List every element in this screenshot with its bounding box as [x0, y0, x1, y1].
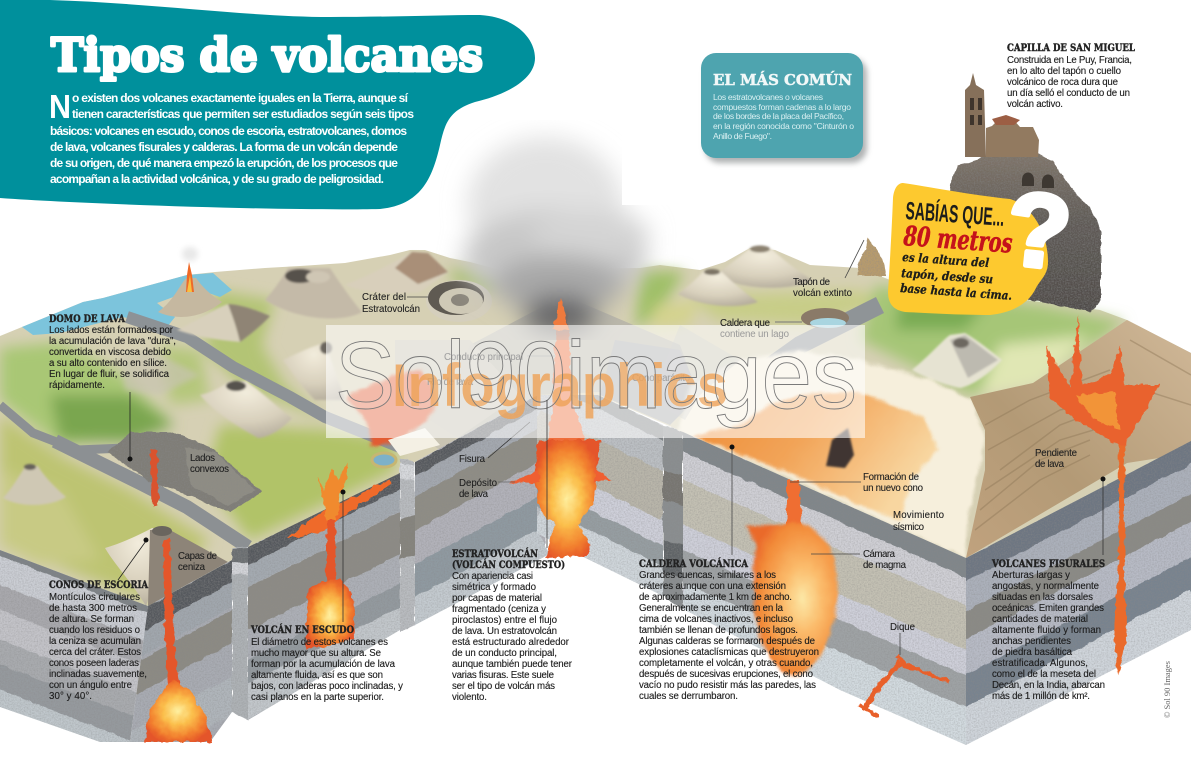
text block: caldera volcánica: cima de volcanes inactivos, e incluso: [639, 614, 793, 625]
text block: volcanes fisurales: [991, 559, 1105, 702]
text block: capilla de San Miguel: Construida en Le Puy, Francia,: [1007, 55, 1132, 66]
leader: volcán en escudo: [340, 490, 346, 622]
text block: estratovolcán: simétrica y formado: [452, 582, 536, 593]
callout: el más común: de los bordes de la placa del Pacífico,: [713, 111, 844, 121]
callout: el más común: compuestos forman cadenas a lo largo: [713, 102, 851, 112]
callout: el más común: Anillo de Fuego".: [713, 131, 772, 141]
label: pendiente de lava: [1035, 448, 1077, 470]
text block: conos de escoria: cerca del cráter. Estos: [49, 647, 141, 658]
text block: volcán en escudo: bajos, con laderas poco inclinadas, y: [251, 681, 403, 692]
title banner: [0, 0, 535, 209]
lava river: [345, 370, 436, 447]
label: tapón de volcán extinto: Tapón de: [793, 277, 830, 288]
cone: right: [912, 333, 1002, 388]
text block: caldera volcánica: [639, 558, 819, 702]
text block: volcanes fisurales: de piedra basáltica: [992, 647, 1073, 658]
rock: [945, 150, 1101, 312]
text block: conos de escoria: de hasta 300 metros: [49, 603, 137, 614]
text block: caldera volcánica: completamente el volcán, y otras cuando,: [639, 658, 813, 669]
terrain surface: [0, 238, 1191, 606]
text block: conos de escoria: con un ángulo entre: [49, 680, 132, 691]
text block: volcanes fisurales: más de 1 millón de km².: [992, 691, 1090, 702]
label: fisura: Fisura: [459, 454, 486, 465]
label: tapón de volcán extinto: volcán extinto: [793, 288, 852, 299]
block face: estratovolcán right: [537, 395, 663, 596]
text block: domo de lava: [49, 314, 176, 391]
crater of the stratovolcano: [426, 280, 492, 322]
text block: volcanes fisurales: Decán, en la India, abarcan: [992, 680, 1105, 691]
label: lados convexos: convexos: [190, 464, 229, 475]
text block: volcanes fisurales: anchas pendientes: [992, 636, 1071, 647]
leader: volcanes fisurales: [1100, 476, 1106, 555]
cone: beyond stratovolcano: [345, 252, 448, 293]
water: [22, 273, 232, 335]
text block: volcán en escudo: [250, 624, 403, 703]
label: movimiento sísmico: sísmico: [893, 522, 924, 533]
text block: volcanes fisurales: VOLCANES FISURALES: [991, 559, 1105, 570]
cone: beside the watermark: [283, 342, 345, 400]
text block: domo de lava: rápidamente.: [49, 380, 105, 391]
block face: caldera: [675, 425, 975, 750]
text block: capilla de San Miguel: volcán activo.: [1007, 99, 1063, 110]
text block: capilla de San Miguel: CAPILLA DE SAN MIGUEL: [1007, 43, 1135, 54]
cone: cinder cone: [105, 526, 228, 606]
leader: conos de escoria: [118, 538, 148, 580]
watermark: Infographics: [392, 352, 728, 419]
text block: domo de lava: a su alto contenido en sílice.: [49, 358, 167, 369]
block face: conos de escoria, right side: [130, 560, 232, 742]
bell tower: [965, 73, 986, 157]
label: depósito de lava: de lava: [459, 489, 489, 500]
callout: el más común: EL MÁS COMÚN: [713, 71, 852, 89]
text block: estratovolcán: varias fisuras. Este suele: [452, 670, 554, 681]
smoke plume: [463, 137, 650, 335]
text block: volcán en escudo: casi planos en la parte superior.: [251, 692, 384, 703]
lava: cono de escoria: [144, 538, 212, 742]
label: capas de ceniza: [178, 551, 217, 573]
text block: domo de lava: la acumulación de lava "dura",: [49, 336, 176, 347]
cone: left small: [3, 464, 66, 505]
text block: estratovolcán: piroclastos) entre el flujo: [452, 615, 557, 626]
text block: estratovolcán: ESTRATOVOLCÁN: [452, 548, 538, 560]
text block: estratovolcán: (VOLCÁN COMPUESTO): [452, 559, 565, 571]
text block: capilla de San Miguel: volcánico de roca dura que: [1007, 77, 1118, 88]
text block: capilla de San Miguel: [1007, 43, 1135, 110]
label: cámara de magma: de magma: [863, 560, 907, 571]
text block: caldera volcánica: también se llenan de profundos lagos.: [639, 625, 798, 636]
text block: volcán en escudo: mucho mayor que su altura. Se: [251, 648, 381, 659]
fact: tapón, desde su: [901, 266, 994, 286]
cone: under dome text: [120, 350, 200, 395]
text block: conos de escoria: 30° y 40°.: [49, 691, 92, 702]
label: lados convexos: [190, 453, 229, 475]
base land: [0, 248, 1191, 606]
callout: sabías que: [888, 170, 1076, 315]
text block: volcán en escudo: El diámetro de estos volcanes es: [251, 637, 388, 648]
rock and chapel: [945, 73, 1101, 312]
cones: back right: [678, 246, 812, 306]
text block: estratovolcán: de un conducto principal,: [452, 648, 557, 659]
text block: caldera volcánica: Grandes cuencas, similares a los: [639, 570, 776, 581]
eruption glow: [553, 298, 569, 330]
question mark: ?: [1001, 170, 1076, 292]
label: lados convexos: Lados: [190, 453, 215, 464]
callout: el más común: Los estratovolcanes o volcanes: [713, 92, 823, 102]
text block: caldera volcánica: después de sucesivas erupciones, el cono: [639, 669, 813, 680]
text block: estratovolcán: fragmentado (ceniza y: [452, 604, 546, 615]
label: dique: Dique: [890, 622, 915, 633]
text block: volcanes fisurales: angostas, y normalmente: [992, 581, 1099, 592]
text block: caldera volcánica: Generalmente se encuentran en la: [639, 603, 784, 614]
intro text: de su origen, de qué manera empezó la erupción, de los procesos que: [50, 156, 398, 170]
text block: conos de escoria: cuando los residuos o: [49, 625, 140, 636]
label: formación de un nuevo cono: Formación de: [863, 472, 919, 483]
text block: caldera volcánica: de aproximadamente 1 km de ancho.: [639, 592, 792, 603]
text block: caldera volcánica: vacío no pudo resistir más las paredes, las: [639, 680, 816, 691]
caldera lake: [801, 308, 849, 328]
label: caldera que contiene un lago: Caldera que: [720, 318, 770, 329]
label: cámara de magma: [811, 549, 907, 571]
text block: conos de escoria: [49, 580, 148, 702]
central cone: [430, 300, 700, 440]
block edge strip: center right: [663, 425, 683, 609]
fact: base hasta la cima.: [900, 281, 1012, 303]
text block: caldera volcánica: cráteres aunque con una extensión: [639, 581, 786, 592]
cone: middle left: [200, 381, 292, 438]
leader: caldera volcánica: [730, 444, 734, 555]
fact: [900, 250, 1012, 303]
text block: domo de lava: Los lados están formados por: [49, 325, 174, 336]
text block: estratovolcán: [452, 548, 573, 703]
lava: estratovolcán: [508, 298, 612, 558]
new cone crater: [826, 428, 854, 468]
block face: estratovolcán left: [405, 390, 545, 630]
lateral dome rock: [108, 432, 262, 512]
label: formación de un nuevo cono: [790, 472, 923, 494]
text block: estratovolcán: Con apariencia casi: [452, 571, 533, 582]
caldera inner: [692, 392, 938, 520]
leader line: fisura: [488, 422, 530, 458]
block edge strip: [232, 547, 248, 720]
text block: volcán en escudo: altamente fluida, así es que son: [251, 670, 383, 681]
text block: conos de escoria: Montículos circulares: [49, 592, 140, 603]
text block: volcán en escudo: VOLCÁN EN ESCUDO: [250, 624, 354, 636]
text block: estratovolcán: ser el tipo de volcán más: [452, 681, 555, 692]
fact: es la altura del: [902, 250, 990, 270]
text block: volcanes fisurales: oceánicas. Emiten grandes: [992, 603, 1104, 614]
text block: estratovolcán: violento.: [452, 692, 487, 703]
label: caldera que contiene un lago: contiene un lago: [720, 329, 789, 340]
intro text: N: [49, 88, 71, 125]
leader: domo de lava: [128, 392, 132, 462]
credit: © Sol 90 Images: [1162, 661, 1172, 718]
labels beneath the watermark: [427, 352, 690, 388]
text block: caldera volcánica: explosiones cataclísmicas que destruyeron: [639, 647, 819, 658]
text block: caldera volcánica: Algunas calderas se formaron después de: [639, 636, 815, 647]
label: cráter del estratovolcán: Estratovolcán: [362, 304, 420, 315]
text block: capilla de San Miguel: un día selló el conducto de un: [1007, 88, 1130, 99]
nave: [986, 118, 1039, 157]
block face: volcán en escudo: [248, 473, 400, 720]
label: caldera que contiene un lago: [720, 318, 802, 340]
labels beneath the watermark: Cono parásito: [632, 373, 690, 384]
heading: SABÍAS QUE...: [905, 196, 1005, 232]
text block: domo de lava: convertida en viscosa debido: [49, 347, 171, 358]
cone: lava island volcano: [158, 247, 222, 317]
lake: shield block: [372, 453, 396, 467]
label: capas de ceniza: ceniza: [178, 562, 206, 573]
label: depósito de lava: Depósito: [459, 478, 497, 489]
callout: el más común: en la región conocida como "Cinturón o: [713, 121, 854, 131]
labels beneath the watermark: Conducto principal: [444, 352, 523, 363]
leader: estratovolcán: [546, 400, 548, 548]
text block: volcanes fisurales: como el de la meseta del: [992, 669, 1096, 680]
text block: domo de lava: DOMO DE LAVA: [49, 314, 125, 325]
label: tapón de volcán extinto: [793, 240, 864, 299]
text block: conos de escoria: conos poseen laderas: [49, 658, 139, 669]
lava: domo: [150, 450, 158, 505]
intro text: acompañan a la actividad volcánica, y de su grado de peligrosidad.: [50, 172, 384, 186]
intro text: o existen dos volcanes exactamente iguales en la Tierra, aunque sí: [72, 91, 409, 105]
text block: volcanes fisurales: altamente fluido y forman: [992, 625, 1101, 636]
text block: volcanes fisurales: cantidades de material: [992, 614, 1088, 625]
text block: estratovolcán: aunque también puede tener: [452, 659, 573, 670]
block face: conos de escoria, left side: [0, 550, 148, 742]
lava: volcán en escudo: [287, 462, 392, 650]
lava: dique: [858, 655, 950, 716]
text block: estratovolcán: de lava. Un estratovolcán: [452, 626, 557, 637]
label: dique: [890, 622, 915, 655]
text block: conos de escoria: CONOS DE ESCORIA: [49, 580, 148, 591]
text block: volcanes fisurales: Aberturas largas y: [992, 570, 1070, 581]
label: cráter del estratovolcán: [362, 292, 428, 315]
lava: volcán fisural: [1035, 315, 1160, 675]
title: Tipos de volcanes: [51, 28, 483, 82]
label: formación de un nuevo cono: un nuevo cono: [863, 483, 923, 494]
labels beneath the watermark: Río de lava: [427, 377, 474, 388]
channels between blocks: [127, 317, 400, 447]
green patches: [0, 268, 1125, 600]
text block: conos de escoria: de altura. Se forman: [49, 614, 134, 625]
label: movimiento sísmico: [893, 510, 944, 533]
label: pendiente de lava: Pendiente: [1035, 448, 1077, 459]
cone: big crater: [265, 268, 362, 318]
watermark: Sol90images: [335, 322, 857, 429]
text block: volcán en escudo: forman por la acumulación de lava: [251, 659, 396, 670]
cone: near shore: [177, 304, 270, 342]
text block: estratovolcán: está estructurado alrededor: [452, 637, 570, 648]
extinct plug: [857, 238, 886, 276]
label: cráter del estratovolcán: Cráter del: [362, 292, 406, 303]
text block: caldera volcánica: CALDERA VOLCÁNICA: [639, 558, 748, 570]
intro text: básicos: volcanes en escudo, conos de escoria, estratovolcanes, domos: [50, 124, 407, 138]
text block: volcanes fisurales: situadas en las dorsales: [992, 592, 1093, 603]
text block: capilla de San Miguel: en lo alto del tapón o cuello: [1007, 66, 1121, 77]
intro text: tienen características que permiten ser estudiados según seis tipos: [72, 107, 414, 121]
text block: caldera volcánica: cuales se derrumbaron.: [639, 691, 738, 702]
label: capas de ceniza: Capas de: [178, 551, 217, 562]
caldera foam: [678, 350, 985, 558]
key figure: 80 metros: [902, 221, 1013, 260]
text block: domo de lava: En lugar de fluir, se solidifica: [49, 369, 170, 380]
text block: conos de escoria: inclinadas suavemente,: [49, 669, 147, 680]
callout: el más común: [701, 53, 867, 163]
yellow panel: [888, 183, 1048, 315]
text block: volcanes fisurales: estratificada. Algunos,: [992, 658, 1088, 669]
lava slope: [966, 320, 1191, 558]
intro text: de lava, volcanes fisurales y calderas. La forma de un volcán depende: [50, 140, 398, 154]
label: pendiente de lava: de lava: [1035, 459, 1065, 470]
lava: cámara de magma: [746, 480, 838, 676]
intro text: [49, 88, 414, 186]
label: movimiento sísmico: Movimiento: [893, 510, 944, 521]
text block: estratovolcán: por capas de material: [452, 593, 542, 604]
block edge strip: center left: [400, 458, 415, 632]
text block: conos de escoria: la ceniza se acumulan: [49, 636, 141, 647]
label: cámara de magma: Cámara: [863, 549, 896, 560]
block face: volcanes fisurales: [958, 435, 1191, 750]
label: depósito de lava: [459, 478, 515, 500]
